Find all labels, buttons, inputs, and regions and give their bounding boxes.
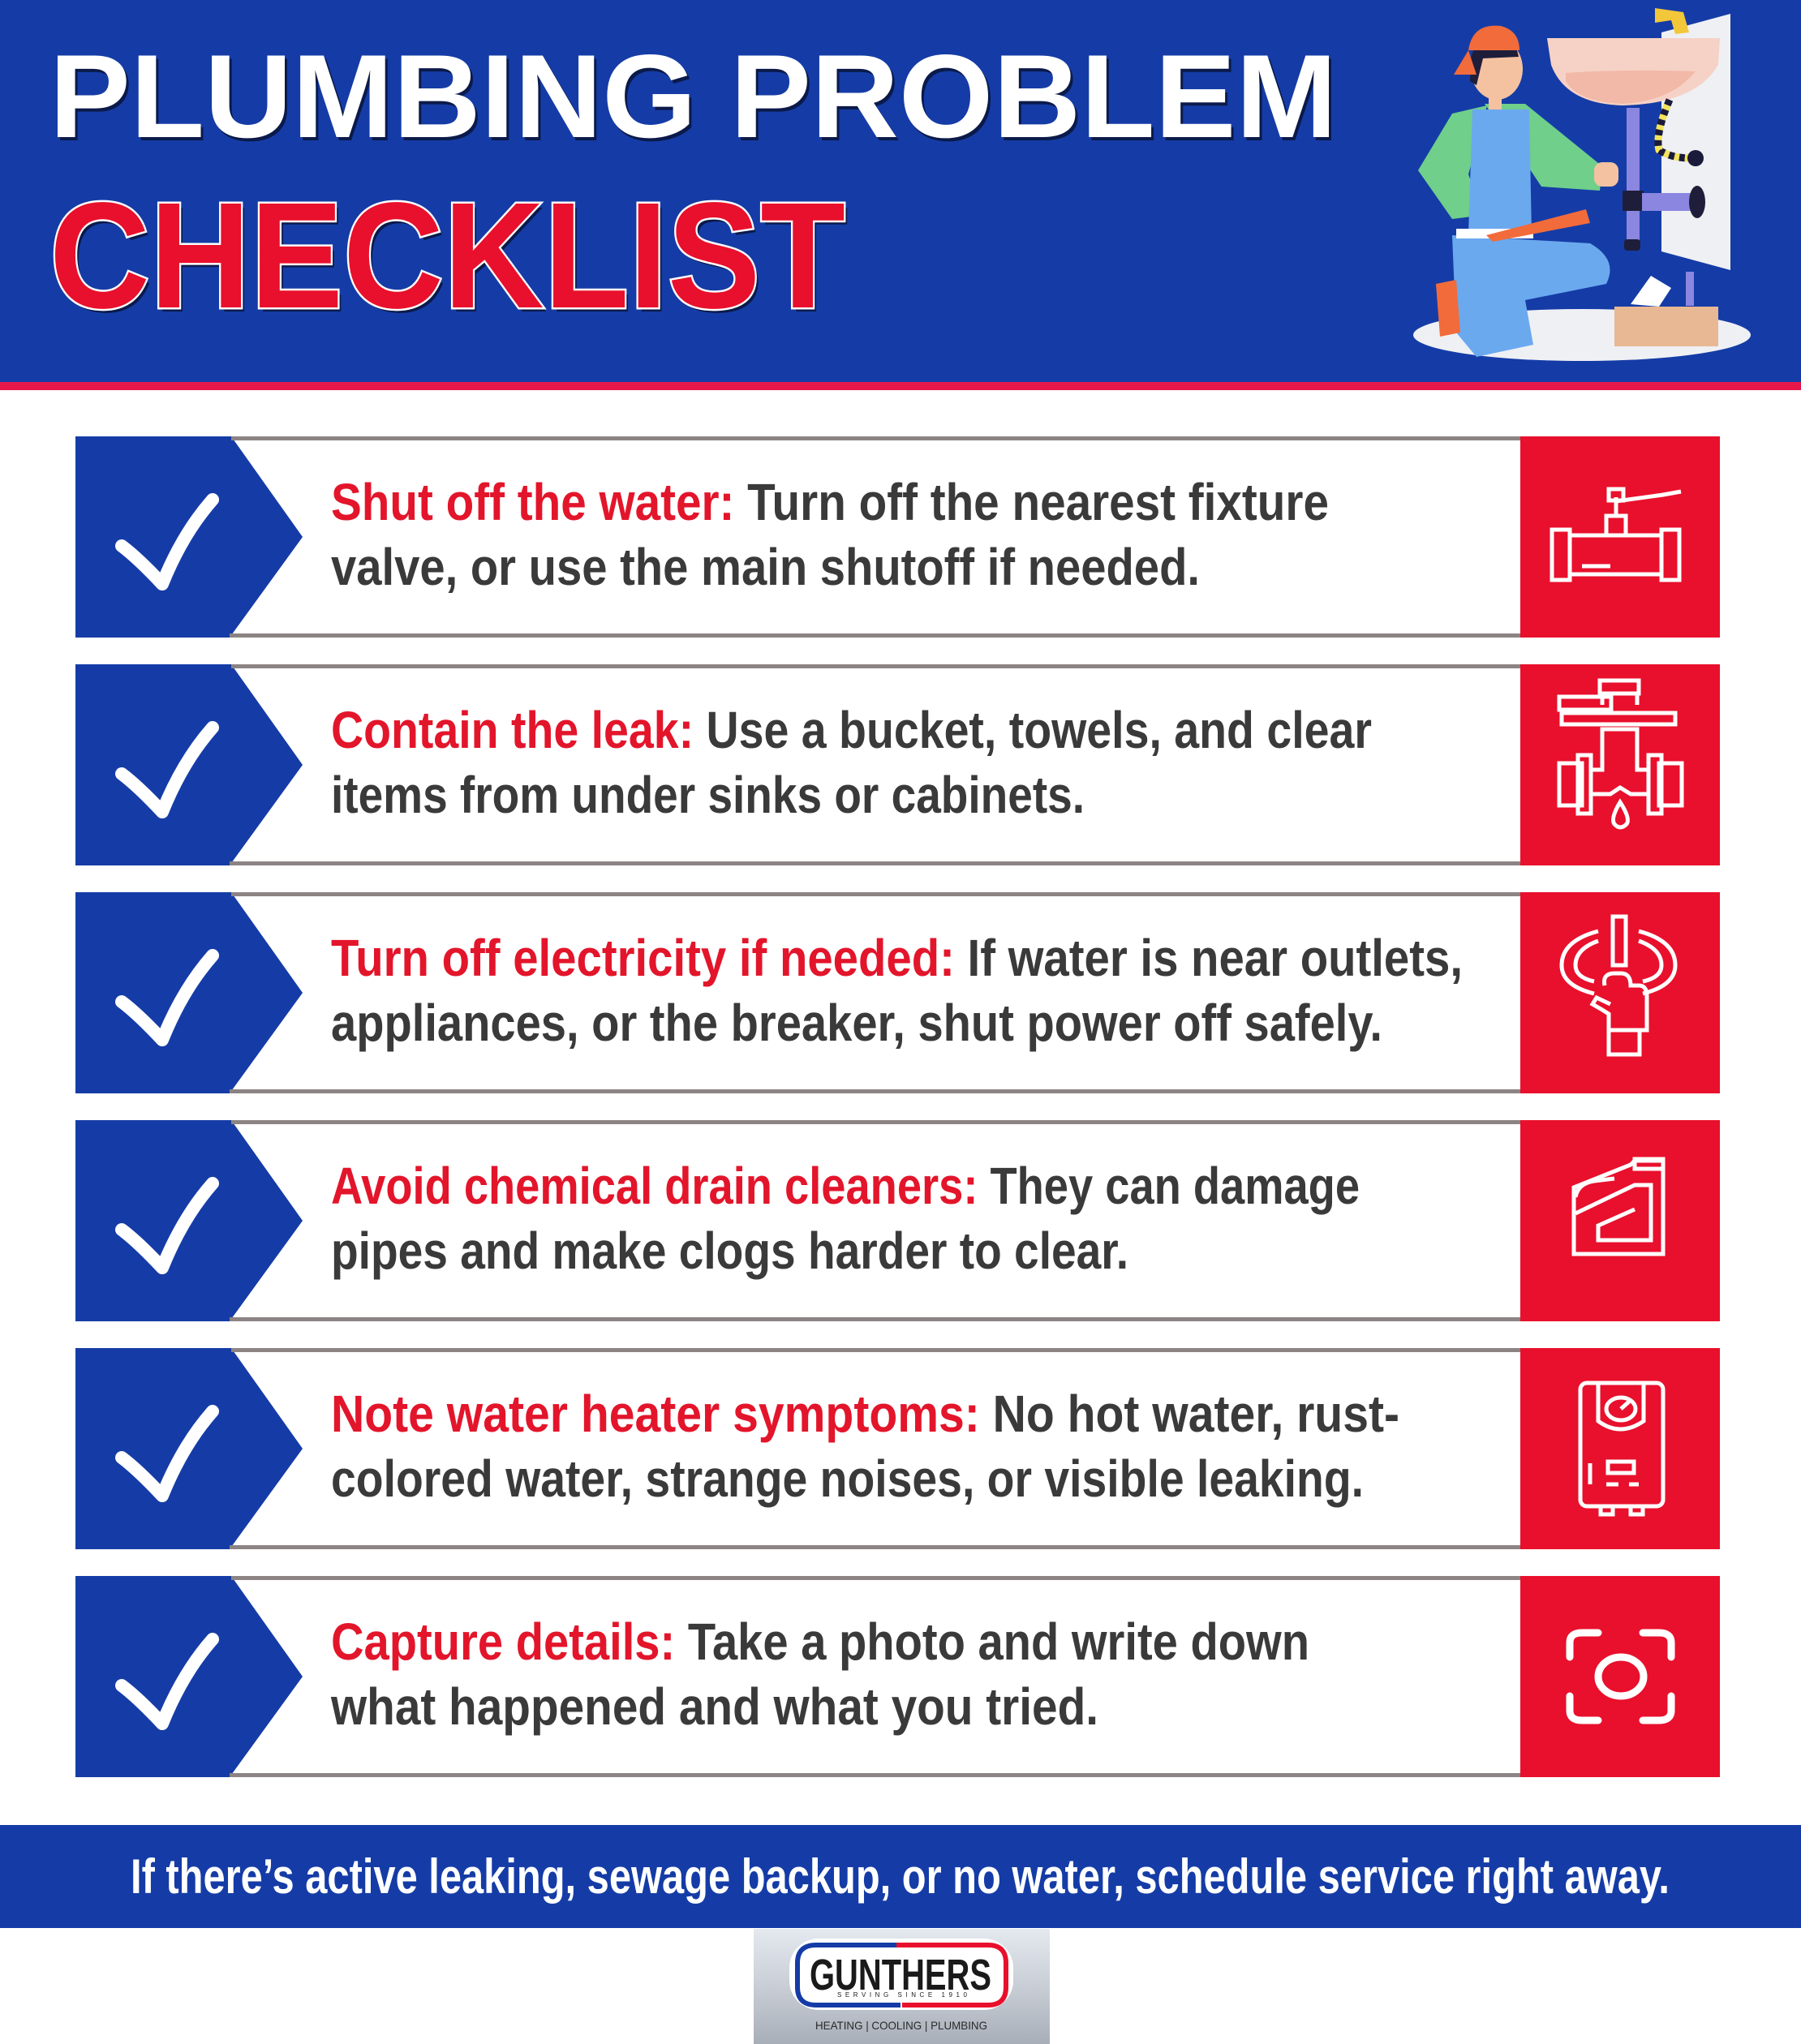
row 6 check badge (75, 1576, 303, 1777)
title: PLUMBING PROBLEM (52, 33, 1339, 165)
row 4 icon: jerry can (1520, 1120, 1720, 1321)
row 1 check badge (75, 436, 303, 638)
row 4 check badge (75, 1120, 303, 1321)
logo: Gunthers: SERVING SINCE 1910 (837, 1991, 968, 1999)
row 5 text: Note water heater symptoms: No hot water, rust- (331, 1385, 1399, 1443)
title: CHECKLIST (49, 172, 845, 340)
row 2 text: Contain the leak: Use a bucket, towels, and clear (331, 701, 1372, 759)
row 6 text: what happened and what you tried. (330, 1677, 1098, 1736)
row 1 icon: valve (1520, 436, 1720, 638)
row 5 icon: water heater (1520, 1348, 1720, 1549)
logo: Gunthers: GUNTHERS (810, 1951, 991, 1999)
row 3 text (331, 929, 1463, 1052)
row 3 icon: power hand (1520, 892, 1720, 1093)
header band (0, 0, 1801, 390)
logo: Gunthers: HEATING | COOLING | PLUMBING (815, 2019, 987, 2032)
title: PLUMBING PROBLEM (49, 30, 1337, 162)
row 2 check badge (75, 664, 303, 865)
logo: Gunthers (754, 1929, 1050, 2044)
row 3 text: Turn off electricity if needed: If water is near outlets, (331, 929, 1463, 987)
title: CHECKLIST (53, 176, 849, 344)
row 2 text: items from under sinks or cabinets. (331, 766, 1085, 824)
row 1 text: Shut off the water: Turn off the nearest fixture (331, 473, 1329, 531)
row 4 text: pipes and make clogs harder to clear. (331, 1222, 1128, 1280)
row 3: electricity (75, 892, 1720, 1093)
row 5: water heater (75, 1348, 1720, 1549)
row 6 text (330, 1612, 1309, 1736)
row 5 text: colored water, strange noises, or visible leaking. (331, 1449, 1364, 1508)
row 1 text: valve, or use the main shutoff if needed. (331, 538, 1200, 596)
row 6 text: Capture details: Take a photo and write down (331, 1612, 1309, 1671)
row 4 text: Avoid chemical drain cleaners: They can damage (331, 1157, 1360, 1215)
row 5 text (331, 1385, 1399, 1508)
row 2 text (331, 701, 1372, 824)
row 1: shut off the water (75, 436, 1720, 638)
title (49, 30, 1339, 344)
illustration: plumber at sink (1413, 8, 1751, 361)
footer banner (0, 1825, 1801, 1928)
row 4 text (331, 1157, 1360, 1280)
row 6 icon: camera focus (1520, 1576, 1720, 1777)
row 3 check badge (75, 892, 303, 1093)
row 6: capture details (75, 1576, 1720, 1777)
row 2 icon: leaking pipe (1520, 664, 1720, 865)
row 1 text (331, 473, 1329, 596)
row 2: contain the leak (75, 664, 1720, 865)
row 4: chemical cleaners (75, 1120, 1720, 1321)
row 3 text: appliances, or the breaker, shut power off safely. (331, 994, 1382, 1052)
row 5 check badge (75, 1348, 303, 1549)
